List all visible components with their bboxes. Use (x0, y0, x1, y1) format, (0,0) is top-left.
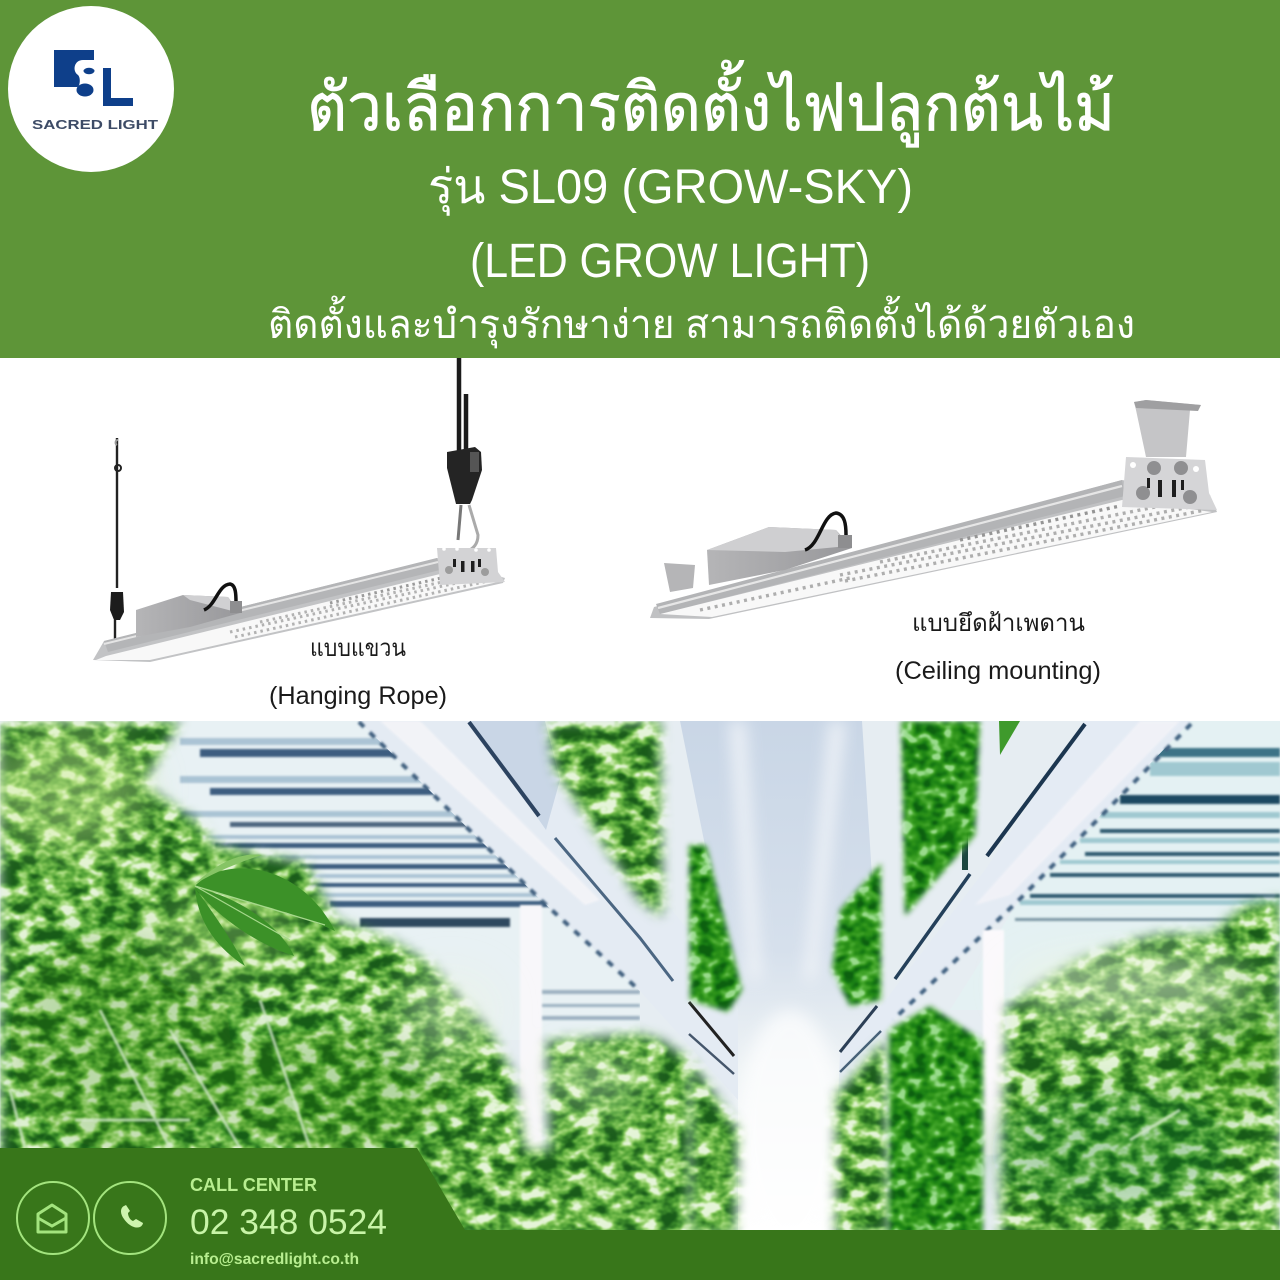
foliage: lower corridor left (690, 1060, 738, 1235)
foliage: right of corridor (832, 863, 881, 1006)
tagline: ติดตั้งและบำรุงรักษาง่าย สามารถติดตั้งได้ด้วยตัวเอง (268, 295, 1135, 349)
caption: Hanging Rope: (Hanging Rope) (269, 682, 447, 710)
beam: right (838, 721, 1191, 1100)
foliage: left of corridor (689, 845, 742, 1012)
foliage: large left mass (0, 721, 690, 1240)
logo: Sacred Light: SACRED LIGHT (32, 118, 158, 132)
subtitle: product type: (LED GROW LIGHT) (470, 235, 870, 288)
caption: ceiling Thai: แบบยึดฝ้าเพดาน (912, 610, 1085, 637)
foliage: middle right (889, 1006, 983, 1235)
header band (0, 0, 1280, 358)
slats: left (179, 737, 640, 1021)
column: right (983, 930, 1004, 1155)
cannabis leaf (195, 854, 335, 966)
beam: left (359, 721, 738, 1100)
caption: hanging Thai: แบบแขวน (310, 635, 406, 662)
phone number: 02 348 0524 (190, 1203, 387, 1242)
icon: mail (17, 1182, 89, 1254)
foliage: top right of corridor (901, 721, 980, 916)
subtitle: model: รุ่น SL09 (GROW-SKY) (428, 161, 913, 216)
caption: Ceiling mounting: (Ceiling mounting) (895, 657, 1101, 685)
product panel (0, 358, 1280, 721)
greenhouse photo (0, 721, 1280, 1280)
call center label: CALL CENTER (190, 1175, 317, 1195)
foliage: top centre-left (548, 721, 662, 916)
logo: Sacred Light (8, 6, 174, 172)
tonal shading (0, 730, 1280, 1210)
footer contact bar (0, 1148, 1280, 1280)
column: left (520, 905, 542, 1200)
central corridor (680, 721, 880, 1230)
title: ตัวเลือกการติดตั้งไฟปลูกต้นไม้ (307, 60, 1115, 148)
slats: right (1014, 746, 1280, 922)
stems (10, 1000, 1180, 1148)
lamp: hanging rope (93, 358, 505, 662)
lamp: ceiling mounting (650, 400, 1217, 619)
email: info@sacredlight.co.th (190, 1251, 359, 1268)
icon: phone (94, 1182, 166, 1254)
foliage: lower corridor right (836, 1040, 889, 1235)
foliage: right hill (1000, 899, 1280, 1240)
